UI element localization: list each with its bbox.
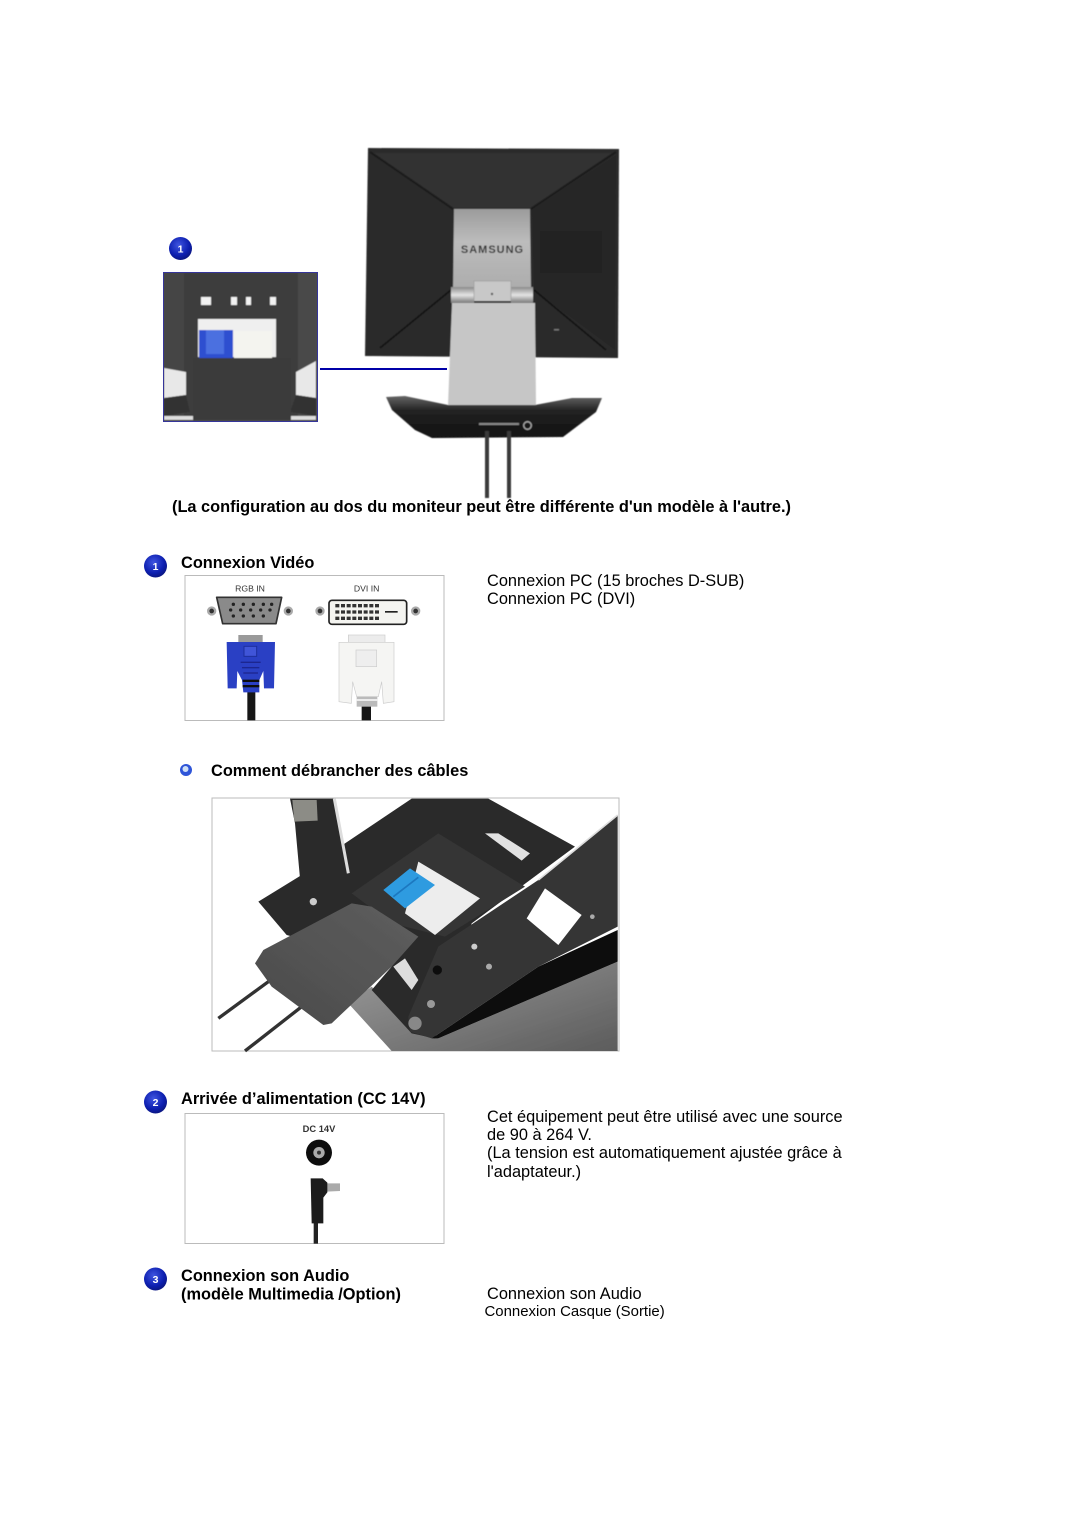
description: power supply: l'adaptateur.)	[487, 1163, 581, 1181]
stand neck with SAMSUNG logo	[453, 209, 531, 290]
description: audio connections: Connexion son Audio	[487, 1285, 642, 1303]
diagram: RGB and DVI connectors	[185, 576, 444, 720]
photo inset: rear connector compartment	[163, 272, 318, 422]
description: power supply: (La tension est automatiquement ajustée grâce à	[487, 1144, 843, 1162]
description: video connections: Connexion PC (15 broches D-SUB)	[487, 572, 744, 590]
port: VGA	[207, 597, 293, 624]
badge: number 1 above inset	[169, 237, 192, 260]
notice text: (La configuration au dos du moniteur peut être différente d'un modèle à l'autre.)	[172, 498, 791, 516]
subheading: Comment débrancher des câbles: Comment débrancher des câbles	[211, 762, 468, 780]
badge: number 2: 2	[153, 1097, 159, 1109]
bullet icon	[180, 764, 192, 776]
badge: number 1: 1	[153, 561, 159, 573]
label: DC 14V: DC 14V	[303, 1124, 336, 1134]
heading: Connexion Vidéo: Connexion Vidéo	[181, 554, 314, 572]
photo: back of the monitor	[365, 148, 619, 498]
stand lower column	[448, 303, 536, 406]
port: DVI	[315, 600, 420, 624]
label: DVI IN: DVI IN	[354, 583, 379, 593]
cables	[485, 431, 511, 498]
description: power supply	[487, 1108, 843, 1181]
description: power supply: Cet équipement peut être utilisé avec une source	[487, 1108, 843, 1126]
power plug	[311, 1178, 340, 1244]
badge: number 2	[144, 1090, 167, 1114]
label: RGB IN: RGB IN	[235, 583, 265, 593]
heading: Connexion son Audio: (modèle Multimedia /Option)	[181, 1286, 401, 1304]
diagram: DC 14V power connector	[185, 1114, 444, 1244]
description: video connections: Connexion PC (DVI)	[487, 590, 635, 608]
power socket	[306, 1140, 332, 1166]
stand hinge	[451, 281, 533, 305]
heading: Connexion son Audio	[181, 1267, 401, 1304]
stand base	[386, 396, 602, 438]
description: power supply: de 90 à 264 V.	[487, 1126, 592, 1144]
stand neck with SAMSUNG logo: SAMSUNG	[461, 244, 524, 256]
heading: Arrivée d'alimentation: Arrivée d’alimentation (CC 14V)	[181, 1090, 426, 1108]
connector line	[320, 368, 447, 370]
cable plug: blue VGA	[227, 635, 275, 720]
photo: unplugging the cables	[212, 798, 619, 1051]
badge: number 3: 3	[153, 1274, 159, 1286]
badge: number 1	[144, 554, 167, 578]
description: audio connections	[484, 1285, 665, 1320]
monitor rear panel	[365, 148, 619, 358]
cable plug: white DVI	[339, 635, 394, 720]
badge: number 3	[144, 1268, 167, 1290]
badge: number 1 above inset: 1	[178, 244, 184, 256]
heading: Connexion son Audio: Connexion son Audio	[181, 1267, 349, 1285]
description: video connections	[487, 572, 744, 608]
description: audio connections: Connexion Casque (Sortie)	[484, 1303, 665, 1320]
